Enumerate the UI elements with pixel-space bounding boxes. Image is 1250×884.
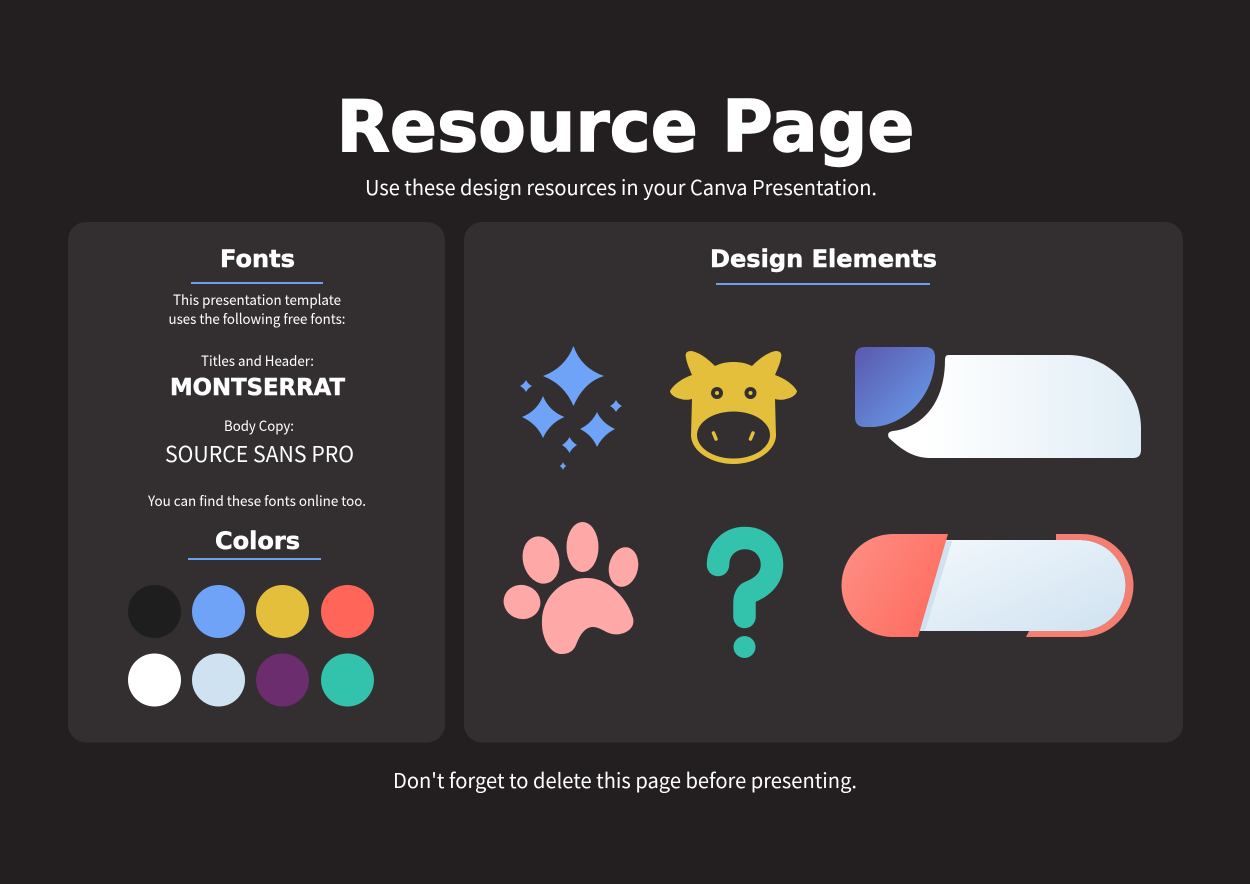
heading: colors: Colors xyxy=(215,527,300,555)
color swatches xyxy=(128,585,374,706)
text: font intro xyxy=(168,290,346,329)
icon: cow head xyxy=(670,351,797,464)
icon: speech bubble xyxy=(855,347,1141,458)
heading: fonts: Fonts xyxy=(220,245,295,273)
panel: fonts and colors xyxy=(68,222,445,742)
icon: sparkles xyxy=(520,346,622,470)
font name: montserrat: MONTSERRAT xyxy=(170,375,345,401)
icon: pill banner xyxy=(842,534,1134,637)
subtitle: Use these design resources in your Canva Presentation. xyxy=(365,171,877,201)
text: font intro: uses the following free fonts: xyxy=(168,309,346,329)
footer note: Don't forget to delete this page before presenting. xyxy=(393,764,857,794)
icon: paw print xyxy=(500,522,642,654)
panel: design elements xyxy=(464,222,1183,742)
text: fonts online: You can find these fonts online too. xyxy=(147,491,366,511)
title: Resource Page xyxy=(336,85,914,168)
text: font intro: This presentation template xyxy=(173,290,341,310)
heading: design elements: Design Elements xyxy=(710,245,937,273)
icon: question mark xyxy=(718,538,772,658)
label: titles and header: Titles and Header: xyxy=(201,351,314,371)
label: body copy: Body Copy: xyxy=(224,416,294,436)
font name: source sans pro: SOURCE SANS PRO xyxy=(165,437,354,469)
